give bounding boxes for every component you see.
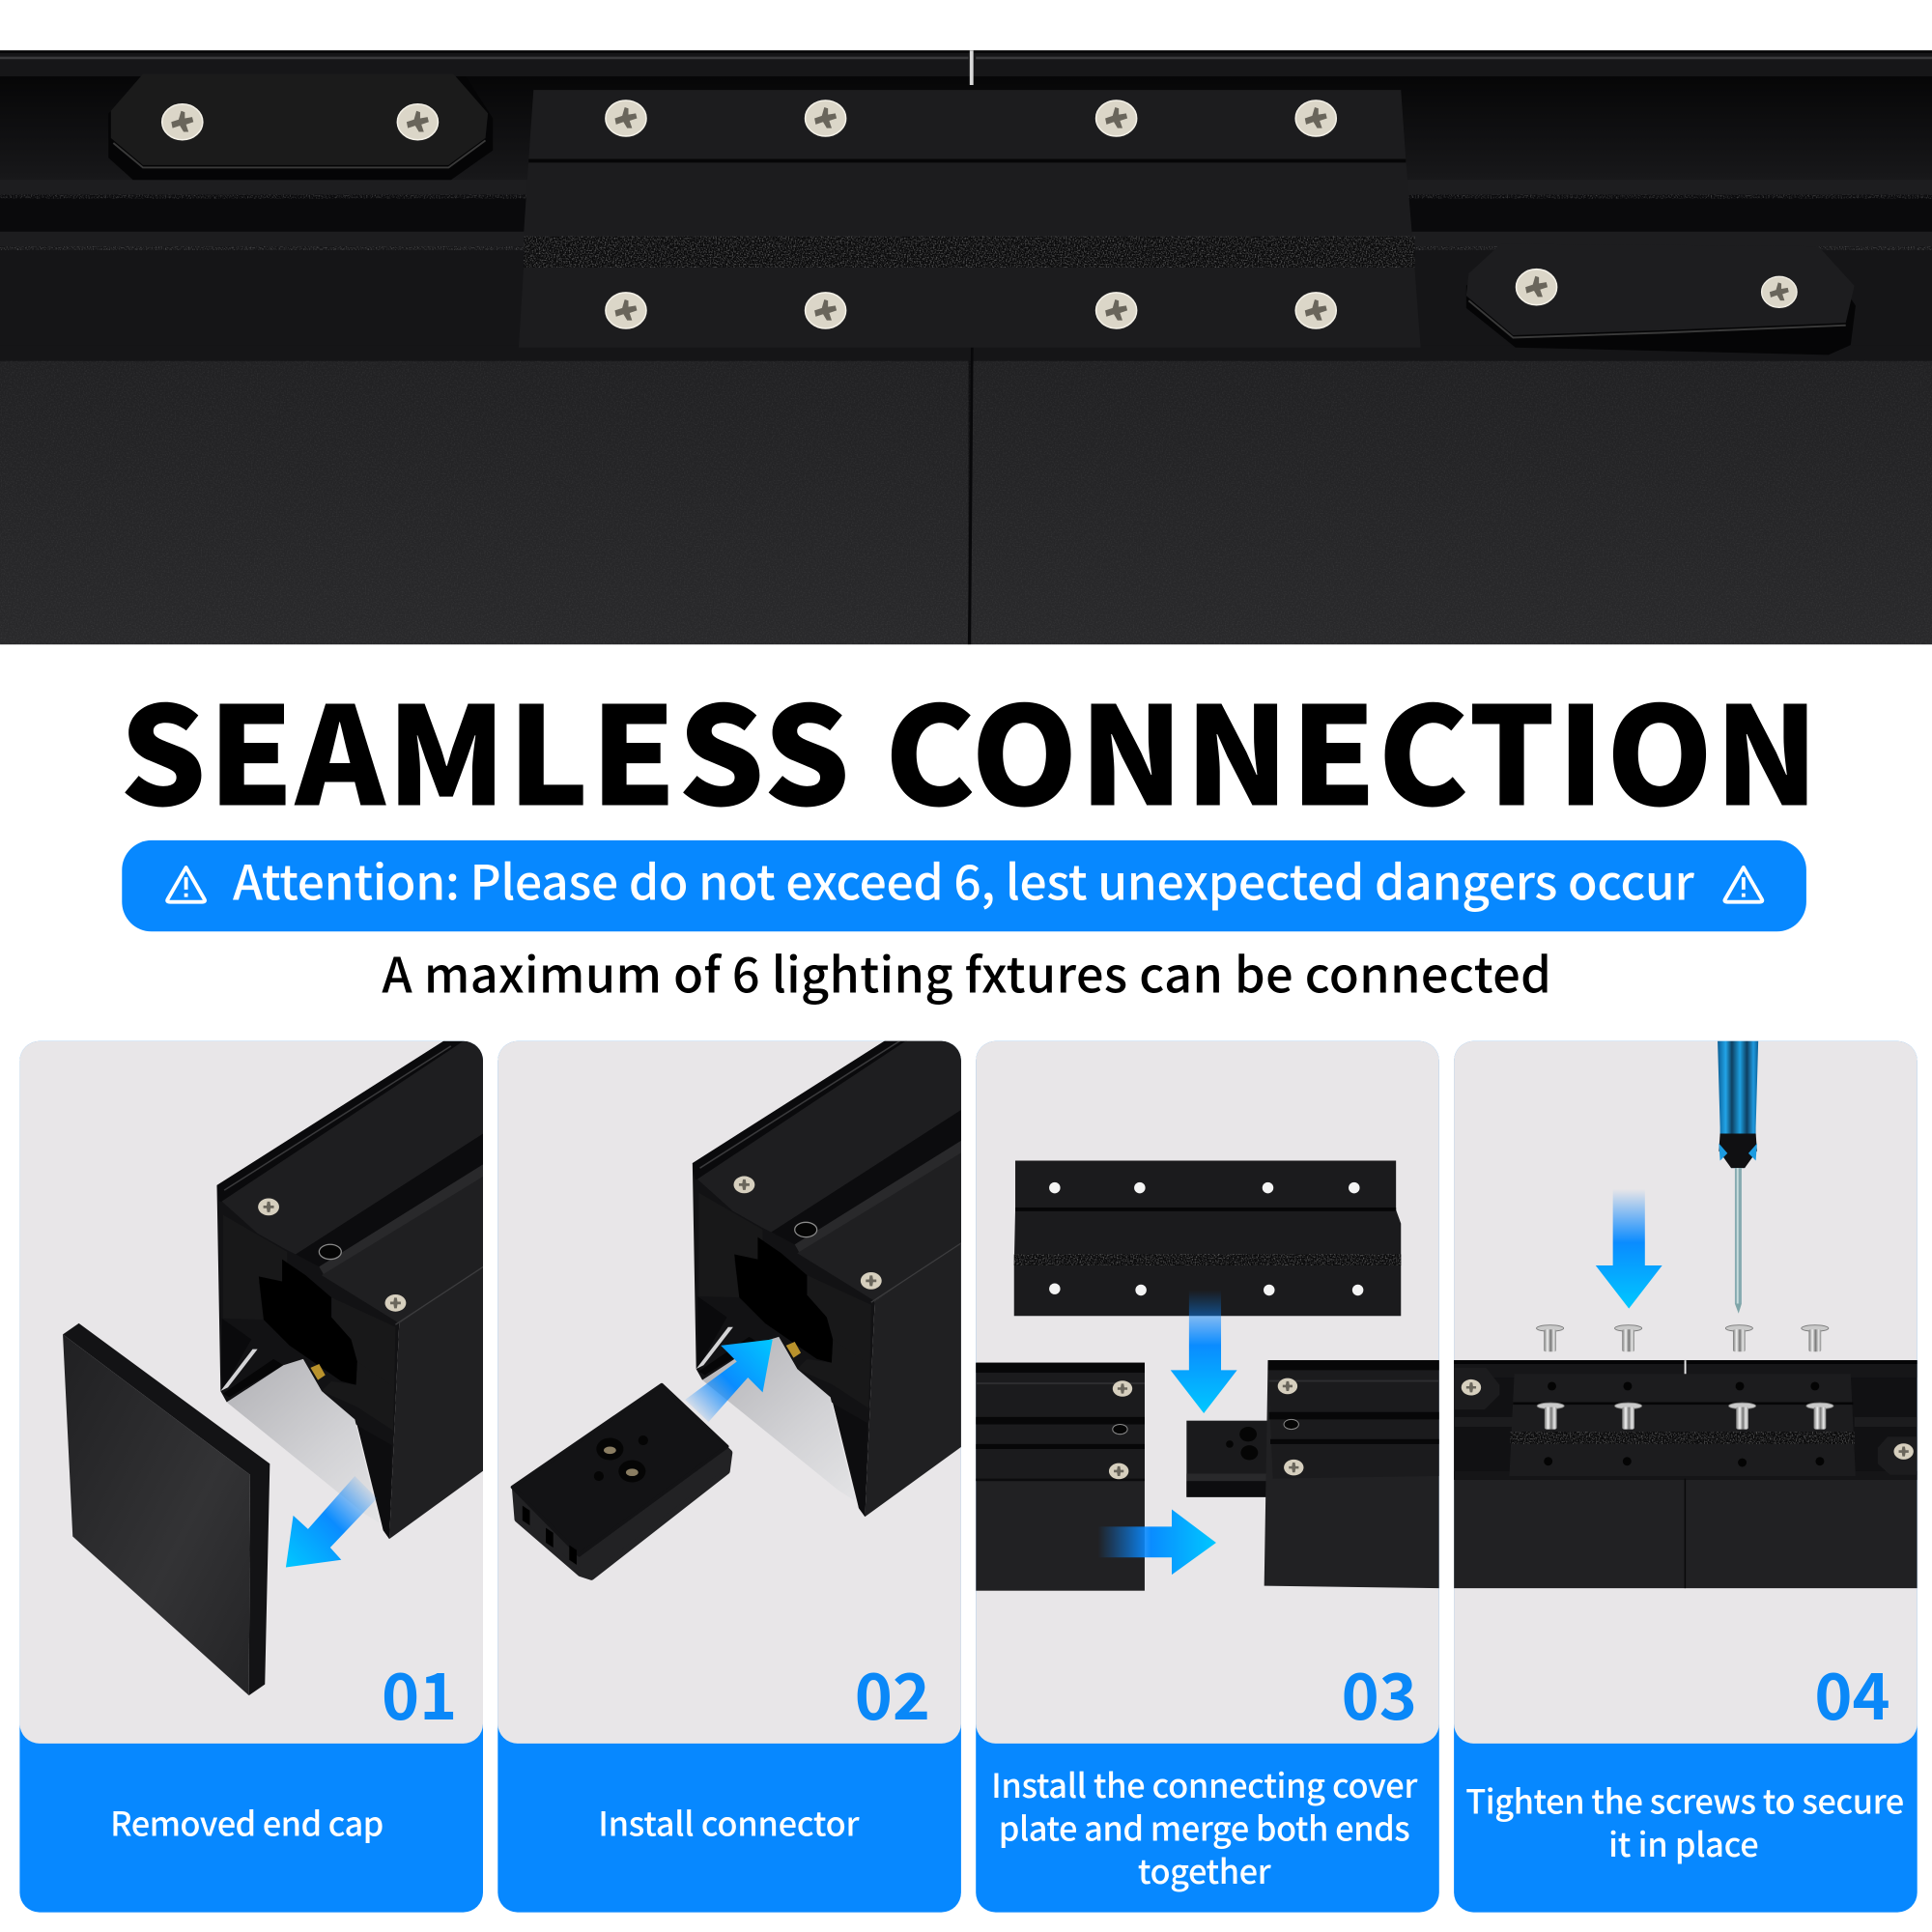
caption: Tighten the screws to secure	[1465, 1776, 1904, 1824]
arrow: screw down	[1596, 1189, 1662, 1309]
number: 04	[1814, 1646, 1890, 1739]
caption	[1465, 1776, 1904, 1866]
icon: warning left	[167, 867, 205, 902]
connecting cover plate	[519, 90, 1421, 348]
screws in plate	[1537, 1403, 1833, 1430]
icon: warning right	[1724, 867, 1762, 902]
subheading: A maximum of 6 lighting fxtures can be connected	[382, 936, 1551, 1007]
right bracket	[1466, 244, 1856, 355]
panel: step 04	[1454, 1041, 1918, 1913]
end cap	[63, 1323, 270, 1695]
number: 02	[855, 1646, 930, 1739]
loose screws	[1537, 1325, 1829, 1351]
caption: it in place	[1608, 1818, 1759, 1866]
connector	[513, 1385, 729, 1577]
panel: step 02	[497, 1019, 969, 1913]
cover plate	[1014, 1161, 1401, 1316]
screws	[162, 100, 1797, 328]
caption: Removed end cap	[110, 1798, 384, 1846]
arrow: slide right	[1097, 1509, 1216, 1575]
caption: Install connector	[598, 1798, 861, 1846]
title: SEAMLESS CONNECTION	[120, 648, 1819, 845]
number: 03	[1342, 1646, 1417, 1739]
joined fixtures	[1454, 1360, 1918, 1588]
attention text: Attention: Please do not exceed 6, lest unexpected dangers occur	[233, 845, 1694, 915]
caption	[991, 1759, 1418, 1893]
caption: plate and merge both ends	[999, 1803, 1410, 1851]
left fixture	[976, 1363, 1145, 1591]
screwdriver	[1718, 1041, 1758, 1314]
product: fixture end with cap removed	[216, 1041, 493, 1539]
product: fixture end	[693, 1019, 969, 1517]
arrow: push in	[685, 1339, 773, 1422]
top photo: joined light fixtures	[0, 50, 1932, 644]
caption: together	[1138, 1845, 1272, 1893]
caption: Install the connecting cover	[991, 1759, 1418, 1807]
attention banner	[122, 840, 1806, 931]
panel: step 01	[19, 1041, 493, 1913]
panel: step 03	[976, 1041, 1439, 1913]
arrow: pull out	[286, 1476, 377, 1567]
connector block	[1186, 1421, 1273, 1497]
right fixture	[1264, 1360, 1439, 1588]
arrow: plate down	[1171, 1290, 1237, 1413]
left bracket	[108, 74, 493, 180]
number: 01	[382, 1646, 457, 1739]
